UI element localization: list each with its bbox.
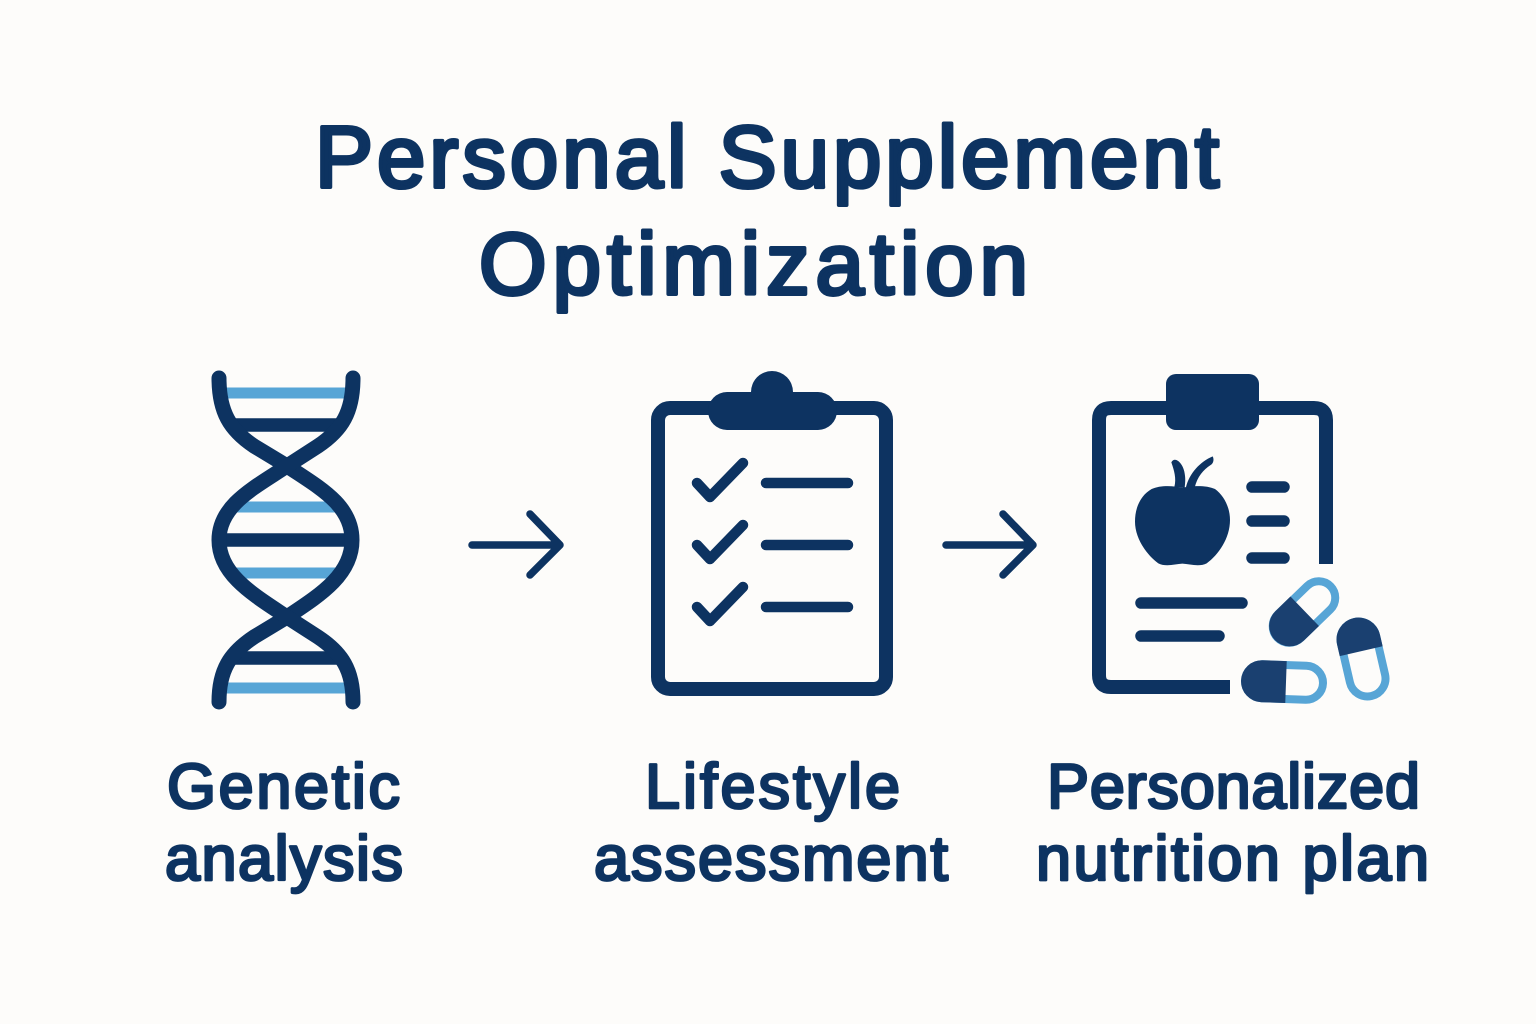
label: lifestyle assessment: assessment bbox=[594, 824, 948, 894]
arrow: lifestyle assessment to nutrition plan bbox=[946, 514, 1033, 575]
label: personalized nutrition plan bbox=[1036, 752, 1429, 894]
label: personalized nutrition plan: Personalized bbox=[1047, 752, 1420, 822]
label: personalized nutrition plan: nutrition plan bbox=[1036, 824, 1429, 894]
arrow: genetic analysis to lifestyle assessment bbox=[472, 514, 560, 575]
icon: lifestyle checklist clipboard bbox=[658, 371, 886, 689]
label: genetic analysis: analysis bbox=[165, 824, 403, 894]
icon: capsule bottom bbox=[1240, 660, 1324, 704]
label: lifestyle assessment: Lifestyle bbox=[645, 752, 900, 822]
icon: DNA double helix bbox=[219, 378, 353, 702]
label: genetic analysis: Genetic bbox=[167, 752, 400, 822]
icon: personalized nutrition plan clipboard bbox=[1099, 374, 1393, 704]
title bbox=[315, 109, 1219, 313]
icon: capsule right bbox=[1332, 613, 1393, 701]
title: Personal Supplement bbox=[315, 109, 1219, 206]
icon: apple bbox=[1135, 456, 1230, 565]
label: lifestyle assessment bbox=[594, 752, 948, 894]
label: genetic analysis bbox=[165, 752, 403, 894]
title: Optimization bbox=[479, 216, 1028, 313]
icon: capsule upper bbox=[1261, 572, 1345, 655]
